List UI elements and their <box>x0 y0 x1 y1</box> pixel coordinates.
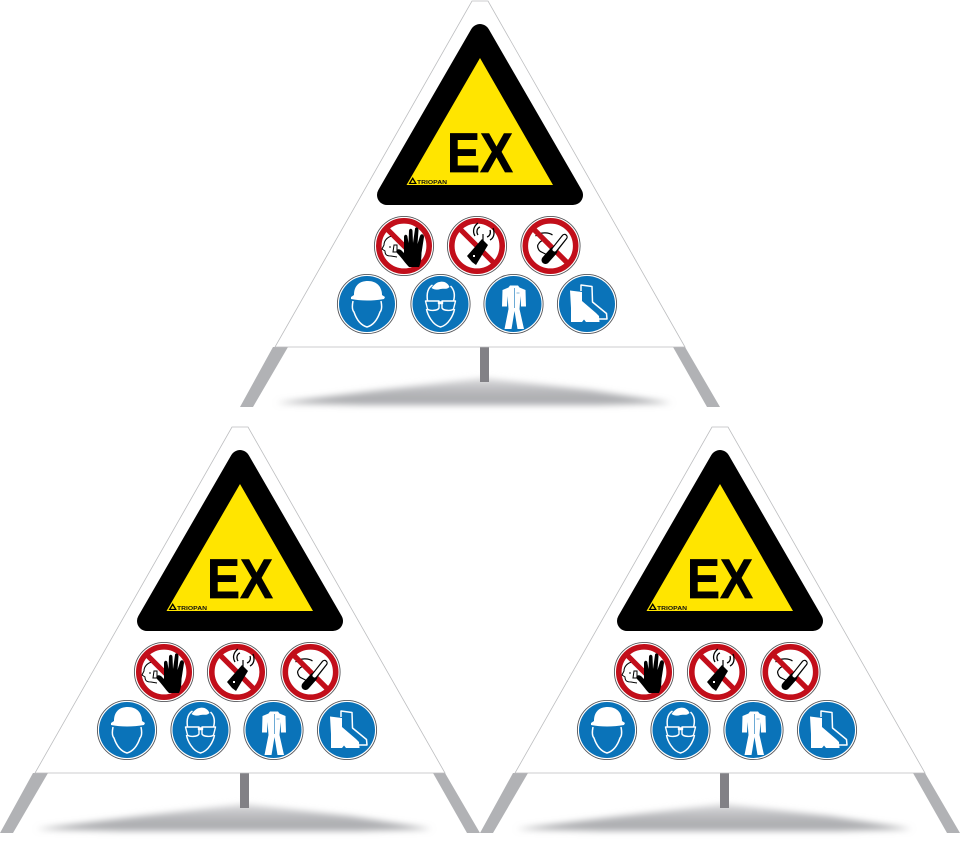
icon: wear goggles <box>171 700 230 760</box>
icon: wear protective suit <box>484 274 543 334</box>
icon: wear protective suit <box>244 700 303 760</box>
brand logo: Triopan <box>648 603 687 612</box>
icon: no smoking <box>761 642 820 702</box>
brand logo: Triopan: TRIOPAN <box>177 606 207 612</box>
brand logo: Triopan <box>168 603 207 612</box>
warning triangle: black border with yellow field <box>627 460 813 621</box>
warning triangle: black border with yellow field <box>387 34 573 195</box>
sign: bottom-left tripod EX sign <box>0 427 480 833</box>
brand logo: Triopan: TRIOPAN <box>657 606 687 612</box>
panel: white triangular board <box>275 1 685 347</box>
heading: EX: EX <box>207 547 273 610</box>
heading: EX: EX <box>447 121 513 184</box>
panel: white triangular board <box>35 427 445 773</box>
sign: bottom-right tripod EX sign <box>480 427 960 833</box>
heading: EX: EX <box>687 547 753 610</box>
icon: wear goggles <box>651 700 710 760</box>
icon: wear safety boots <box>797 700 857 760</box>
icon: wear safety boots <box>557 274 617 334</box>
icon: no smoking <box>521 216 580 276</box>
icon: no smoking <box>281 642 340 702</box>
stand: legs, post and ground shadow <box>0 773 480 833</box>
warning triangle: black border with yellow field <box>147 460 333 621</box>
icon: no mobile phones <box>207 642 267 702</box>
stand: legs, post and ground shadow <box>480 773 960 833</box>
icon: no mobile phones <box>687 642 747 702</box>
icon: wear helmet <box>577 700 637 760</box>
icon: no unauthorised access <box>614 642 674 702</box>
icon: no unauthorised access <box>134 642 194 702</box>
icon: no unauthorised access <box>374 216 434 276</box>
stand: legs, post and ground shadow <box>240 347 720 407</box>
icon: wear helmet <box>97 700 157 760</box>
icon: wear goggles <box>411 274 470 334</box>
icon: wear safety boots <box>317 700 377 760</box>
icon: no mobile phones <box>447 216 507 276</box>
panel: white triangular board <box>515 427 925 773</box>
brand logo: Triopan <box>408 177 447 186</box>
sign: top tripod EX sign <box>240 1 720 407</box>
icon: wear protective suit <box>724 700 783 760</box>
brand logo: Triopan: TRIOPAN <box>417 180 447 186</box>
icon: wear helmet <box>337 274 397 334</box>
